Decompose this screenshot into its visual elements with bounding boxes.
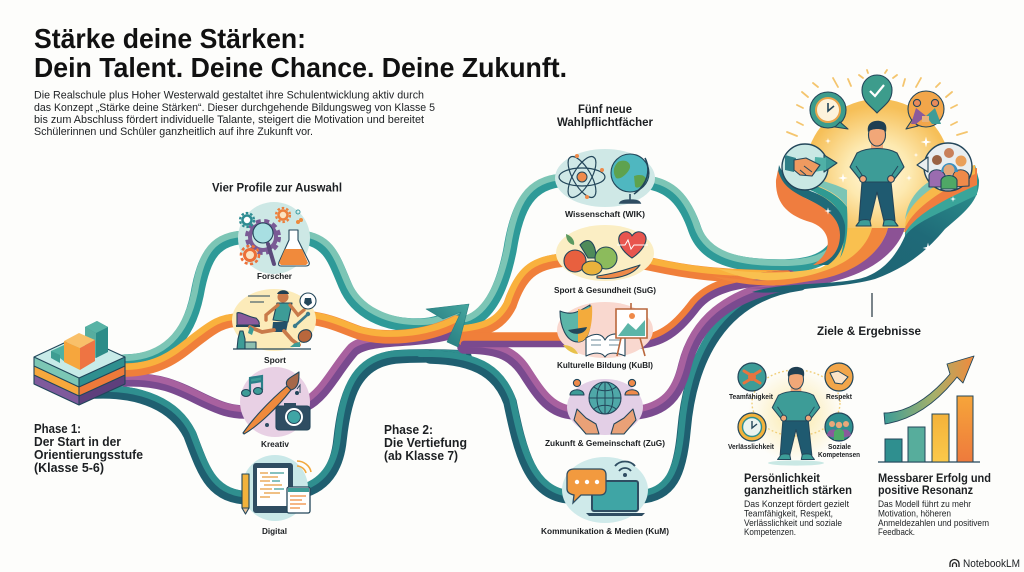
icon: team bbox=[738, 363, 766, 391]
text: measurable success: positive Resonanz bbox=[878, 483, 973, 497]
text: measurable success: Das Modell führt zu mehr bbox=[878, 499, 971, 509]
icon: Sport und Gesundheit bbox=[556, 225, 654, 281]
text: personality: ganzheitlich stärken bbox=[744, 483, 852, 497]
text: phase 2 bbox=[384, 423, 467, 463]
intro paragraph bbox=[34, 90, 435, 138]
ribbons: phase 1 to profiles and phase 2 bbox=[95, 234, 465, 498]
label: Kommunikation und Medien: Kommunikation & Medien (KuM) bbox=[541, 527, 669, 536]
icon: clock bubble bbox=[810, 92, 848, 129]
text: measurable success: Motivation, höheren bbox=[878, 508, 951, 518]
icon: Kommunikation und Medien bbox=[562, 457, 648, 523]
divider line bbox=[871, 293, 873, 317]
title bbox=[34, 23, 567, 83]
text: phase 2: (ab Klasse 7) bbox=[384, 449, 458, 463]
rays around goal figure bbox=[787, 70, 967, 136]
icon: social bbox=[825, 413, 853, 441]
title: Dein Talent. Deine Chance. Deine Zukunft. bbox=[34, 52, 567, 83]
logo: NotebookLM: NotebookLM bbox=[963, 558, 1020, 570]
intro paragraph: Schülerinnen und Schüler ganzheitlich auf ihre Zukunft vor. bbox=[34, 126, 313, 138]
icon: Wissenschaft bbox=[555, 149, 655, 207]
label: Digital: Digital bbox=[262, 527, 287, 536]
icon: group bubble bbox=[917, 143, 972, 191]
intro paragraph: bis zum Abschluss fördert individuelle Talante, steigert die Motivation und bereitet bbox=[34, 114, 424, 126]
label: Kulturelle Bildung: Kulturelle Bildung (KuBI) bbox=[557, 361, 653, 370]
label: Wissenschaft: Wissenschaft (WIK) bbox=[565, 210, 645, 219]
text: phase 1: (Klasse 5-6) bbox=[34, 461, 104, 475]
icon: Zukunft und Gemeinschaft bbox=[567, 379, 643, 435]
text: measurable success: Feedback. bbox=[878, 527, 915, 537]
text: measurable success: Messbarer Erfolg und bbox=[878, 471, 991, 485]
labels: traits: Teamfähigkeit bbox=[729, 392, 773, 401]
heading: four profiles: Vier Profile zur Auswahl bbox=[212, 182, 342, 194]
text: personality: Das Konzept fördert gezielt bbox=[744, 499, 849, 509]
text: phase 1: Der Start in der bbox=[34, 435, 121, 449]
icon: check pin bbox=[862, 75, 892, 113]
icon: phase 1 isometric block bbox=[34, 321, 125, 405]
title: Stärke deine Stärken: bbox=[34, 23, 306, 54]
heading: five electives: Fünf neue bbox=[578, 104, 632, 116]
text: personality bbox=[744, 471, 852, 537]
text: personality: Kompetenzen. bbox=[744, 527, 796, 537]
heading: goals and results: Ziele & Ergebnisse bbox=[817, 324, 921, 338]
text: phase 1: Orientierungsstufe bbox=[34, 448, 143, 462]
labels: traits: Kompetensen bbox=[818, 450, 860, 459]
text: measurable success: Anmeldezahlen und positivem bbox=[878, 518, 989, 528]
icon: respect bbox=[825, 363, 853, 391]
text: phase 2: Die Vertiefung bbox=[384, 436, 467, 450]
chart: rising bars with arrow bbox=[878, 356, 980, 462]
stars on sun bbox=[825, 137, 931, 183]
text: measurable success bbox=[878, 471, 991, 537]
icon: Forscher bbox=[238, 202, 310, 274]
icon: handshake bubble bbox=[906, 91, 944, 129]
text: phase 1: Phase 1: bbox=[34, 422, 81, 436]
intro paragraph: das Konzept „Stärke deine Stärken“. Dieser durchgehende Bildungsweg von Klasse 5 bbox=[34, 102, 435, 114]
icon: handshake circle bbox=[782, 144, 837, 190]
heading: five electives bbox=[557, 104, 654, 129]
heading: five electives: Wahlpflichtfächer bbox=[557, 117, 654, 129]
label: Sport und Gesundheit: Sport & Gesundheit (SuG) bbox=[554, 286, 656, 295]
sun glow behind figure bbox=[806, 99, 950, 232]
label: Zukunft und Gemeinschaft: Zukunft & Gemeinschaft (ZuG) bbox=[545, 439, 665, 448]
labels: traits bbox=[728, 392, 860, 459]
icon: Kulturelle Bildung bbox=[557, 302, 653, 358]
figure: person at goal bbox=[850, 121, 904, 226]
text: personality: Verlässlichkeit und soziale bbox=[744, 518, 842, 528]
icon: Digital bbox=[242, 455, 311, 521]
intro paragraph: Die Realschule plus Hoher Westerwald gestaltet ihre Schulentwicklung aktiv durch bbox=[34, 90, 424, 102]
text: phase 1 bbox=[34, 422, 143, 475]
labels: traits: Verlässlichkeit bbox=[728, 442, 774, 451]
label: Sport: Sport bbox=[264, 356, 286, 365]
icon: reliability bbox=[738, 413, 766, 441]
labels: traits: Soziale bbox=[828, 442, 851, 451]
panel: personality graphic bbox=[728, 363, 860, 466]
text: personality: Teamfähigkeit, Respekt, bbox=[744, 508, 833, 518]
ribbons: phase 2 to electives and goals bbox=[420, 177, 838, 497]
text: personality: Persönlichkeit bbox=[744, 471, 820, 485]
icon: Sport bbox=[232, 289, 316, 351]
label: Kreativ: Kreativ bbox=[261, 440, 289, 449]
label: Forscher: Forscher bbox=[257, 272, 293, 281]
text: phase 2: Phase 2: bbox=[384, 423, 433, 437]
labels: traits: Respekt bbox=[826, 392, 852, 401]
main arrow at phase 2 bbox=[426, 304, 469, 347]
icon: Kreativ bbox=[240, 367, 310, 437]
swoosh: rainbow to platform bbox=[712, 165, 979, 293]
